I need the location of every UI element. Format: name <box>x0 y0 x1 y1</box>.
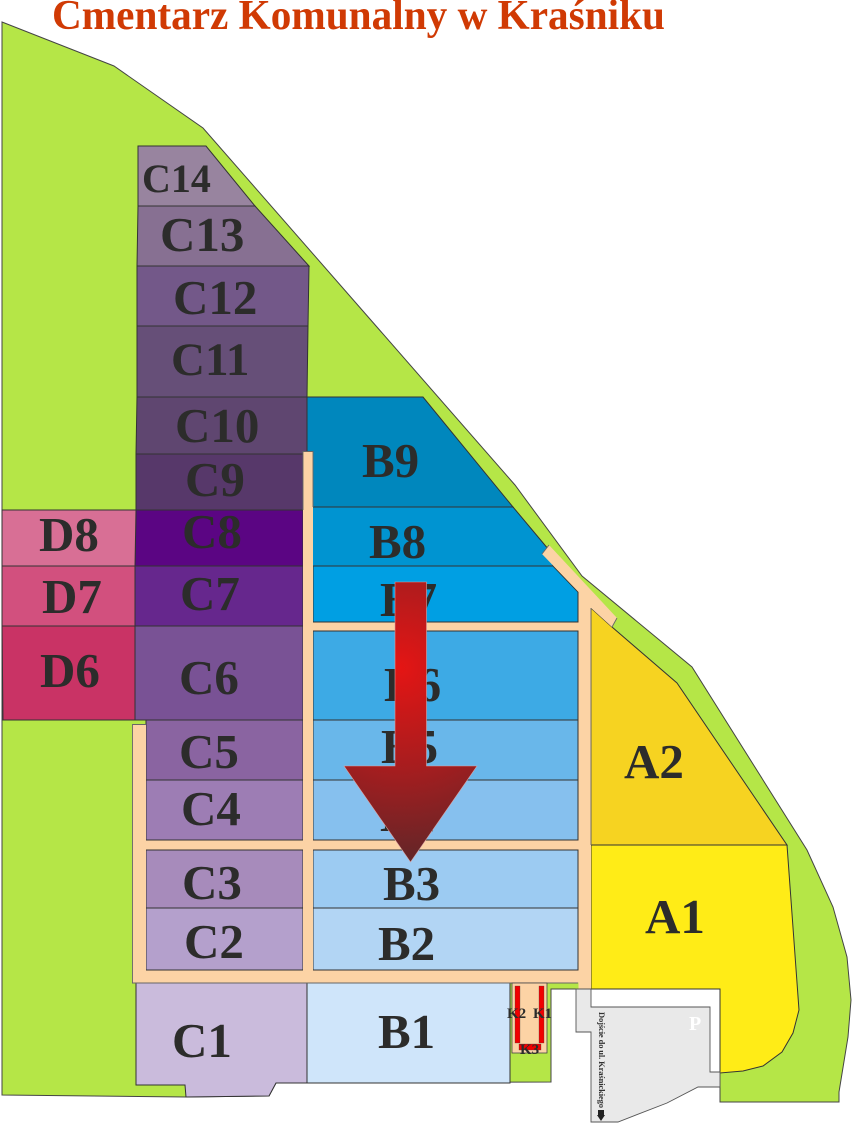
plot B5: B5 <box>381 719 438 774</box>
plot C6 <box>135 626 303 720</box>
plot C1 <box>136 983 307 1097</box>
plot C9 <box>136 452 303 510</box>
plot B4 <box>313 780 578 842</box>
plot B3 <box>313 850 578 911</box>
plot C5 <box>146 720 303 780</box>
parking area <box>576 989 720 1122</box>
chapel block: K2 <box>507 1006 526 1022</box>
plot B8 <box>307 507 553 569</box>
parking area: P <box>689 1013 701 1035</box>
plot B1 <box>307 983 510 1083</box>
plot C4: C4 <box>181 781 241 836</box>
plot B7: B7 <box>380 572 437 627</box>
plot B9 <box>307 397 513 507</box>
plot B6 <box>313 631 578 720</box>
plot C11: C11 <box>171 334 249 386</box>
plot A1 <box>591 845 799 1073</box>
plot C6: C6 <box>179 650 239 705</box>
plot C7 <box>135 566 303 626</box>
plot B1: B1 <box>378 1004 435 1059</box>
plot B4: B4 <box>380 787 437 842</box>
plot B7 <box>313 566 578 627</box>
plot C7: C7 <box>180 566 240 621</box>
direction arrow <box>344 582 477 862</box>
plot C5: C5 <box>179 724 239 779</box>
plot D7 <box>2 566 135 626</box>
plot C2: C2 <box>184 914 244 969</box>
plot B6: B6 <box>384 657 441 712</box>
plot D6 <box>2 626 135 720</box>
plot A2 <box>591 608 787 845</box>
chapel block: K3 <box>520 1042 539 1058</box>
plot C8: C8 <box>182 504 242 559</box>
plot B8: B8 <box>369 514 426 569</box>
plot C12 <box>137 266 309 326</box>
plot C12: C12 <box>173 270 257 325</box>
plot D6: D6 <box>40 643 100 698</box>
plot C14: C14 <box>142 156 211 201</box>
plot A1: A1 <box>645 889 705 944</box>
plot B9: B9 <box>362 433 419 488</box>
plot C3 <box>146 850 303 910</box>
plot B2: B2 <box>378 916 435 971</box>
plot C13 <box>137 206 309 266</box>
plot B2 <box>313 908 578 971</box>
plot C10 <box>136 397 307 454</box>
plot B3: B3 <box>383 856 440 911</box>
plot C2 <box>146 908 303 970</box>
plot A2: A2 <box>624 734 684 789</box>
plot C8 <box>135 504 303 566</box>
plot D7: D7 <box>42 569 102 624</box>
plot C3: C3 <box>182 855 242 910</box>
plot C10: C10 <box>175 398 259 453</box>
plot C4 <box>146 780 303 840</box>
plot B5 <box>313 719 578 780</box>
chapel block: K1 <box>533 1006 552 1022</box>
plot C9: C9 <box>185 452 245 507</box>
plot C14 <box>138 146 255 206</box>
plot C13: C13 <box>160 207 244 262</box>
parking area: Dojście do ul. Kraśnickiego <box>597 1012 607 1108</box>
paths <box>132 451 617 989</box>
plot C1: C1 <box>172 1013 232 1068</box>
plot D8 <box>2 507 136 566</box>
plot D8: D8 <box>39 507 99 562</box>
plot C11 <box>137 326 308 397</box>
chapel block <box>507 983 552 1058</box>
